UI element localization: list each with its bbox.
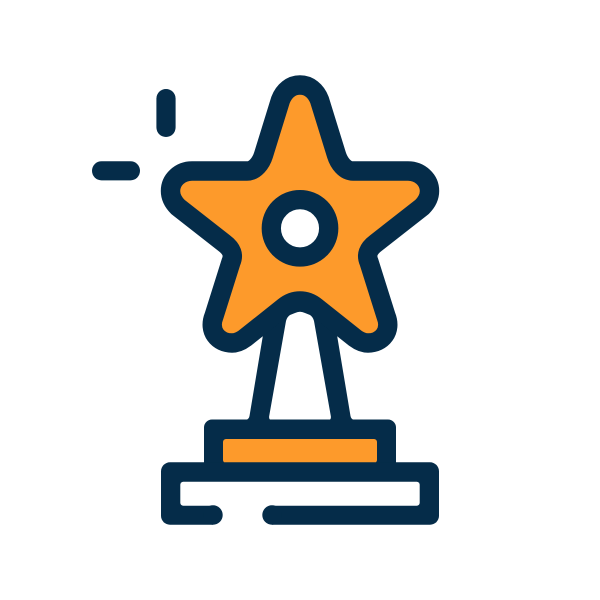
trophy upper base [204,420,396,480]
sparkle lines [102,99,166,171]
trophy lower base [161,462,439,526]
stem opening [269,312,331,420]
star centre ring [271,200,329,257]
trophy stem [246,305,354,420]
star body [170,85,430,343]
